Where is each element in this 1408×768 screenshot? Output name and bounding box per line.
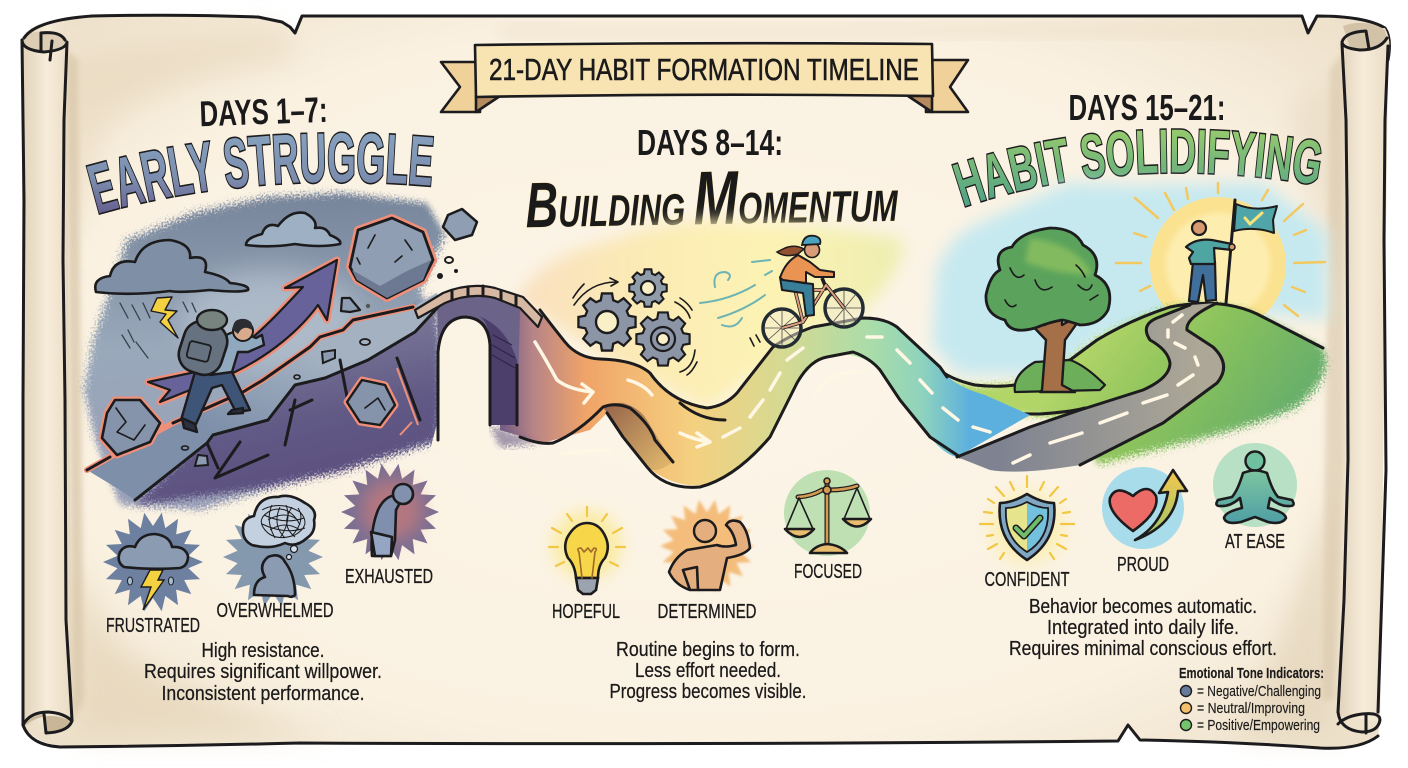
heading: habit solidifying: HABIT SOLIDIFYING [951,128,1322,208]
right scroll roll [1322,23,1389,733]
illustration: sky and sun wash [932,183,1327,375]
illustration: cyclist [750,236,863,347]
illustration: person with flag [1186,200,1277,303]
illustration: rocky hill with bridge [87,286,542,505]
rain [120,302,196,358]
icon: boulder mid [347,380,395,425]
label: focused: FOCUSED [794,561,862,583]
text: building momentum description: Routine begins to form. [616,639,800,661]
text: early struggle description: High resistance. [202,640,324,662]
label: determined: DETERMINED [658,601,756,623]
heading: days 8-14 [525,122,899,244]
illustration: winding road ribbon [490,297,1030,487]
heading: days 15-21 [951,87,1322,208]
illustration: storm clouds and lightning [95,213,340,358]
icon: small cloud [246,213,340,246]
legend: emotional tone indicators: = Negative/Challenging [1197,683,1321,700]
icon: dark cloud [95,240,248,294]
text: early struggle description [144,640,382,705]
label: overwhelmed: OVERWHELMED [216,600,334,622]
legend: emotional tone indicators: Emotional Tone Indicators: [1179,665,1324,682]
icon: lightning bolt [151,297,178,338]
icon: focused [784,470,871,583]
text: habit solidifying description: Integrated into daily life. [1047,617,1239,639]
icon: exhausted [341,464,439,588]
icon: bridge railing [415,286,542,327]
icon: determined [658,500,756,623]
illustration: green hill [935,303,1326,465]
label: hopeful: HOPEFUL [552,601,620,623]
icon: overwhelmed [216,496,334,622]
label: at ease: AT EASE [1225,531,1285,553]
illustration: grey road to summit [957,303,1225,472]
icon: falling rocks [341,209,477,312]
heading: days 8-14: DAYS 8–14: [637,122,783,163]
ribbon tails [441,60,968,112]
illustration: gears [573,269,697,375]
icon: sun [1116,183,1325,333]
heading: days 1-7 [86,89,434,215]
backpack [174,310,232,380]
text: early struggle description: Requires significant willpower. [144,661,382,683]
text: building momentum description: Less effort needed. [635,660,781,682]
icon: frustrated [103,513,203,637]
illustration: storm background wash [84,193,445,510]
icon: large boulder [350,218,433,298]
illustration: tree [986,228,1110,392]
label: frustrated: FRUSTRATED [106,615,200,637]
heading: building momentum: BUILDING MOMENTUM [525,153,899,244]
text: building momentum description: Progress becomes visible. [610,681,806,703]
text: habit solidifying description [1009,596,1277,660]
text: early struggle description: Inconsistent performance. [162,683,364,705]
icon: proud [1102,467,1187,576]
road edge lines [540,310,947,408]
label: proud: PROUD [1117,554,1169,576]
road arrows and dashes [535,337,990,455]
heading: days 1-7: DAYS 1–7: [199,89,328,134]
icon: hopeful [549,507,625,623]
text: building momentum description [610,639,806,703]
icon: boulder left [102,400,160,455]
label: exhausted: EXHAUSTED [345,566,433,588]
icon: at ease [1213,443,1297,553]
heading: early struggle: EARLY STRUGGLE [86,131,434,215]
illustration: rising arrow [148,260,337,402]
small rocks on slope [195,350,335,466]
illustration: colour wash behind road [517,221,903,410]
legend: emotional tone indicators: = Neutral/Improving [1197,700,1305,717]
icon: confident [980,476,1074,591]
hill outlines [87,307,413,470]
title banner [441,43,968,112]
legend: emotional tone indicators: = Positive/Empowering [1197,717,1320,734]
text: habit solidifying description: Behavior becomes automatic. [1029,596,1257,618]
illustration: hiker [174,310,264,432]
illustration: wind lines [700,260,772,326]
legend: emotional tone indicators [1179,665,1324,734]
title banner: 21-DAY HABIT FORMATION TIMELINE [489,52,919,87]
heading: days 15-21: DAYS 15–21: [1068,87,1226,128]
text: habit solidifying description: Requires minimal conscious effort. [1009,638,1277,660]
label: confident: CONFIDENT [984,569,1070,591]
